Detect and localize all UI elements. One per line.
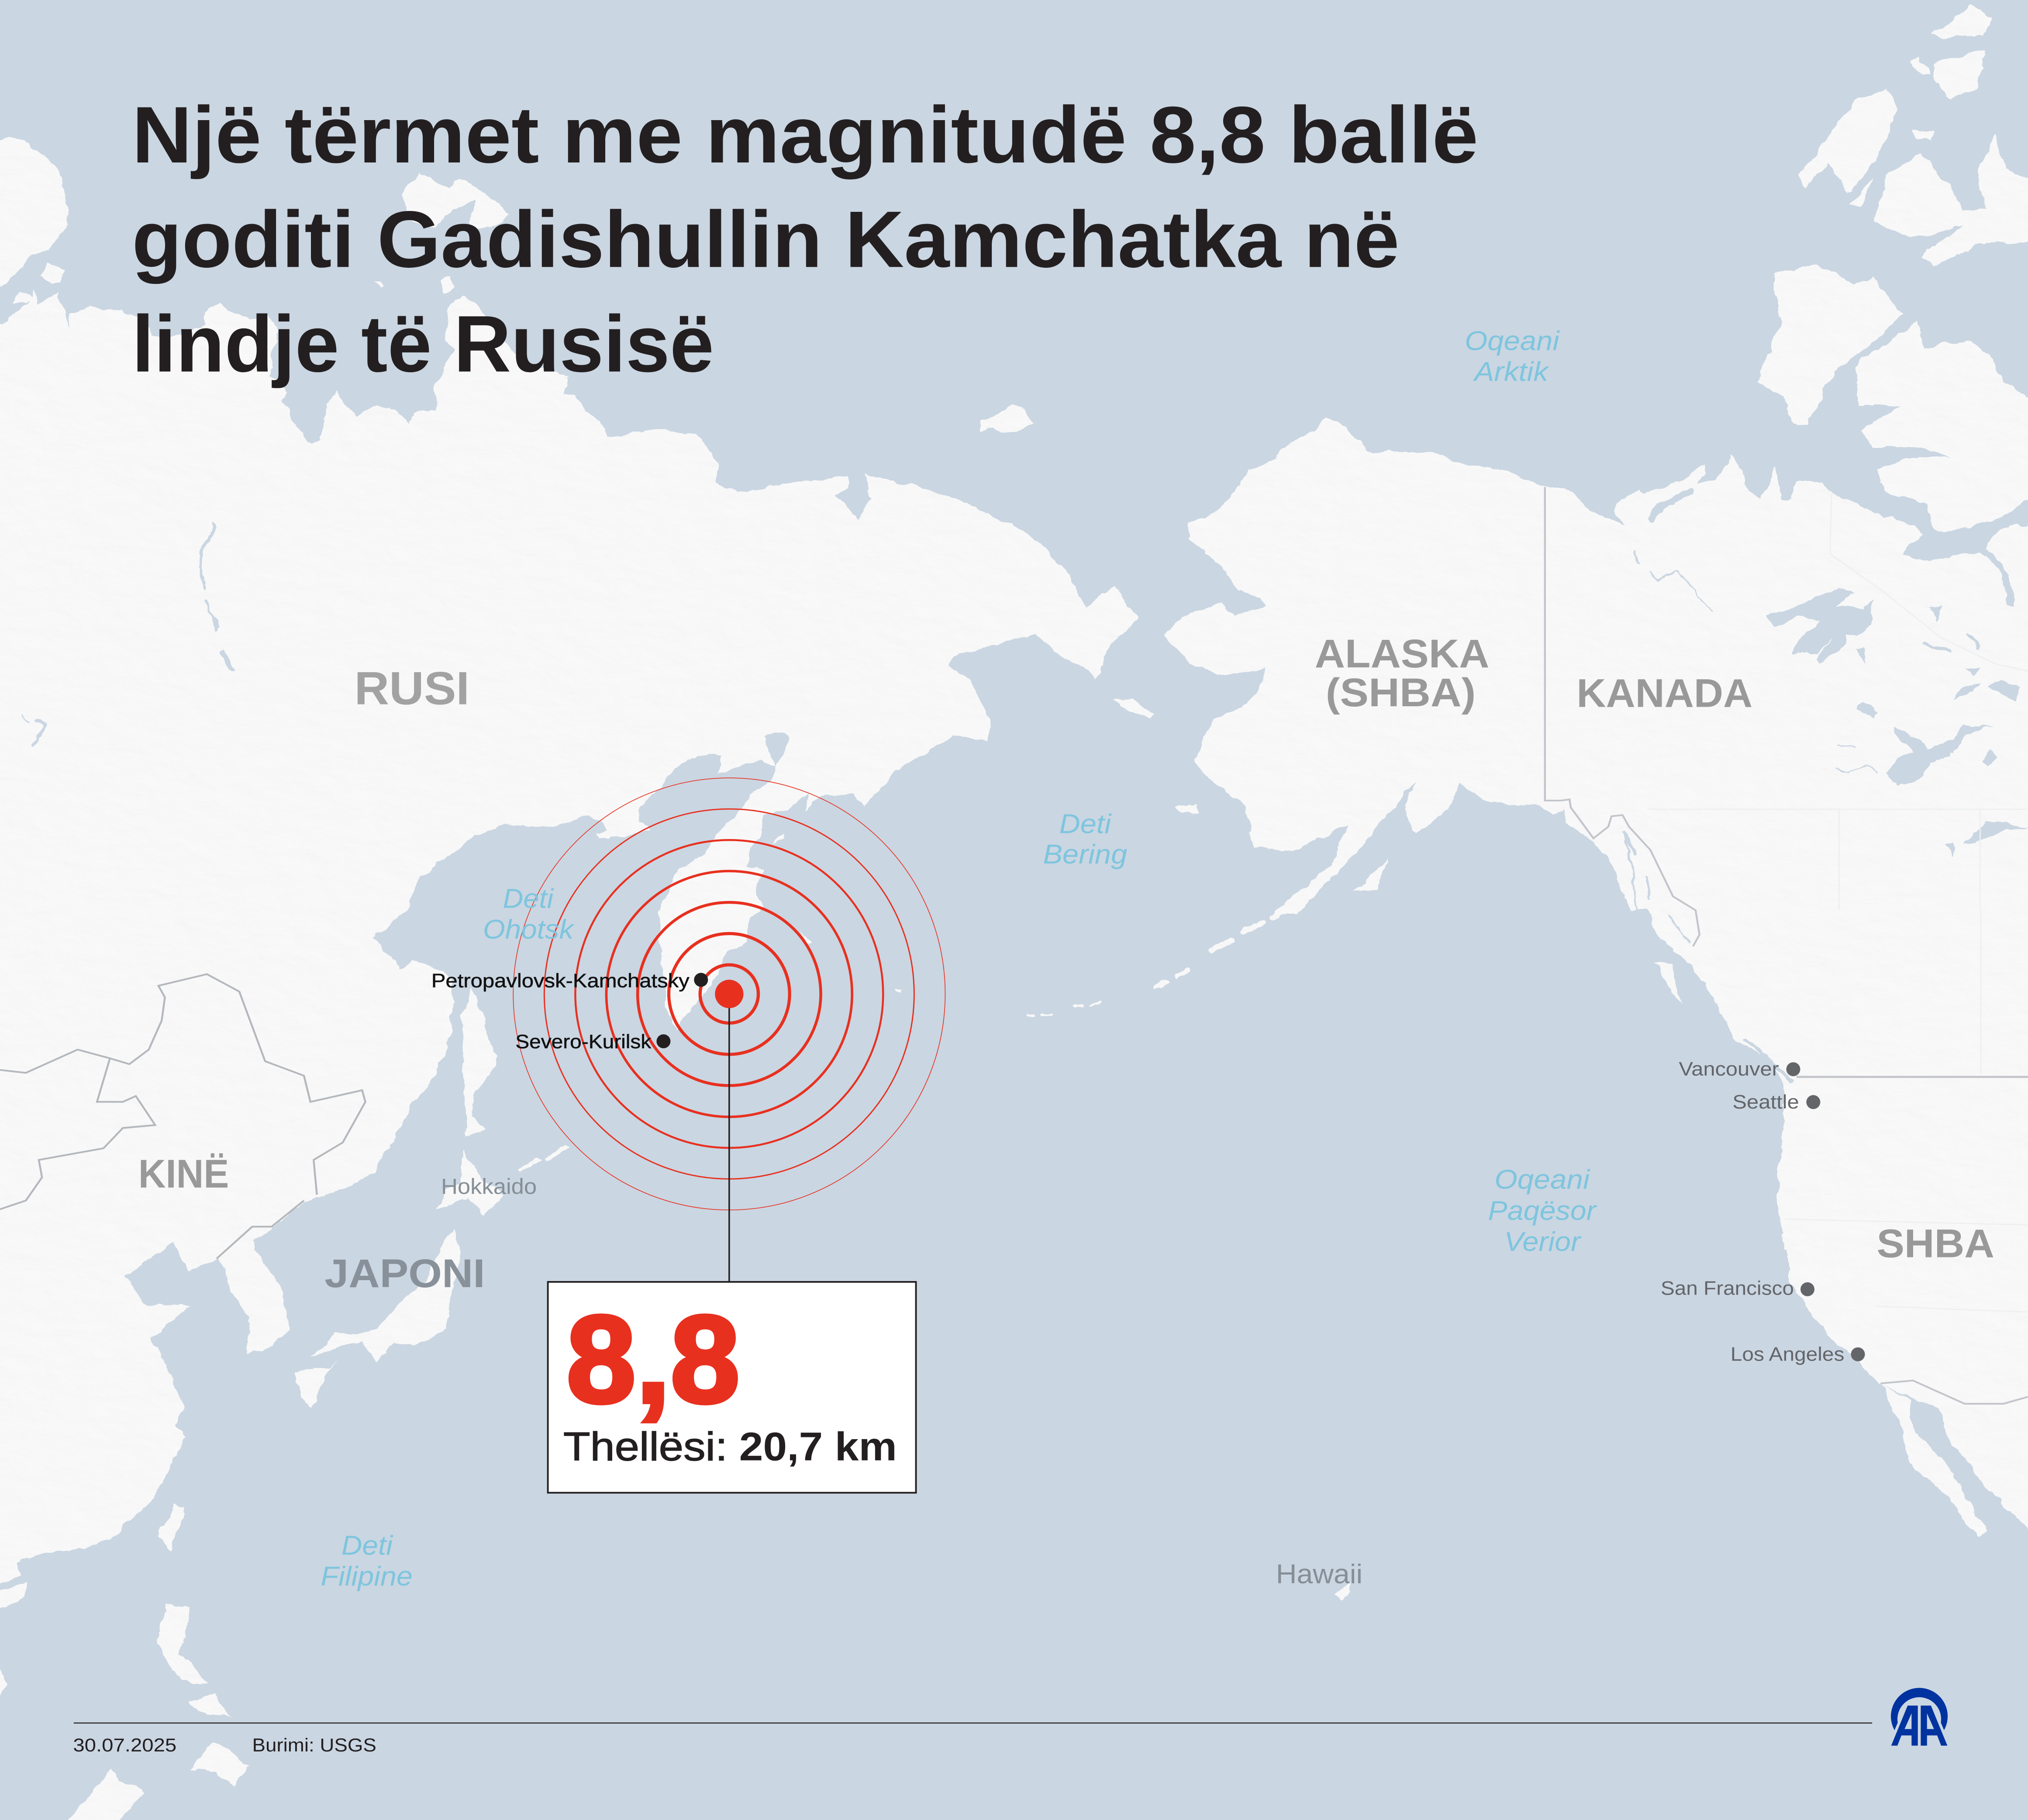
title line 3: lindje të Rusisë <box>132 299 714 389</box>
label: Philippine Sea: Filipine <box>321 1561 413 1592</box>
label: Sea of Okhotsk: Deti <box>503 884 554 914</box>
border: Canada and United States <box>1797 1076 2028 1077</box>
city: Seattle: Seattle <box>1732 1091 1799 1113</box>
label: China: KINË <box>138 1152 229 1196</box>
label: Hawaii: Hawaii <box>1276 1559 1362 1589</box>
label: Arctic Ocean <box>1465 326 1560 387</box>
rivers and inlets: Canada <box>1624 491 2012 1081</box>
city: Vancouver: Vancouver <box>1679 1059 1779 1080</box>
region labels <box>441 1174 1362 1589</box>
land: Baja California <box>1880 1383 1987 1537</box>
city: Los Angeles: Los Angeles <box>1731 1344 1844 1365</box>
label: Sea of Okhotsk: Ohotsk <box>483 915 575 945</box>
city: Seattle <box>1732 1091 1820 1113</box>
label: Sea of Okhotsk <box>483 884 575 945</box>
land: Asian Arctic islands <box>0 139 1033 432</box>
North American city markers <box>1661 1059 1865 1365</box>
rivers and lakes: Siberia <box>23 525 234 746</box>
title line 2: goditi Gadishullin Kamchatka në <box>132 194 1400 284</box>
title line 1: Një tërmet me magnitudë 8,8 ballë <box>132 90 1478 180</box>
label: Philippine Sea: Deti <box>341 1530 393 1561</box>
province and state lines <box>1647 494 2028 1312</box>
depth label: Thellësi: <box>563 1425 728 1469</box>
land: Alaska and western Canada / United States <box>1166 418 2028 1540</box>
land: Sakhalin, Japan and Asian islands <box>0 834 1350 1820</box>
land: North American islands <box>1114 6 2028 1006</box>
borders: Russia, China and Korea <box>0 974 366 1259</box>
label: Canada: KANADA <box>1576 671 1752 716</box>
label: Bering Sea: Deti <box>1059 809 1112 839</box>
Kamchatka city markers <box>431 970 708 1053</box>
label: Arctic Ocean: Oqeani <box>1465 326 1560 356</box>
epicentre marker <box>715 980 743 1008</box>
title <box>132 90 1478 389</box>
label: Russia: RUSI <box>355 662 469 715</box>
city: Severo-Kurilsk: Severo-Kurilsk <box>515 1031 652 1053</box>
sea labels <box>321 326 1597 1592</box>
icon: Anadolu Agency logo <box>1891 1688 1948 1746</box>
label: North Pacific Ocean: Verior <box>1504 1227 1582 1257</box>
border: United States and Mexico <box>1880 1381 2028 1404</box>
label: Alaska: ALASKA <box>1315 632 1489 676</box>
label: Philippine Sea <box>321 1530 413 1592</box>
callout box <box>548 1282 916 1493</box>
label: Bering Sea <box>1043 809 1128 870</box>
label: Hokkaido: Hokkaido <box>441 1174 537 1199</box>
date: 30.07.2025 <box>73 1735 176 1756</box>
inland water <box>23 491 2028 1081</box>
label: USA in parentheses: (SHBA) <box>1326 670 1476 715</box>
source: Burimi: USGS <box>252 1735 376 1756</box>
label: North Pacific Ocean: Oqeani <box>1494 1165 1590 1195</box>
concentric seismic rings <box>513 778 945 1210</box>
label: North Pacific Ocean <box>1488 1165 1597 1257</box>
lakes: northern Canada <box>1768 587 2028 856</box>
city: Petropavlovsk-Kamchatsky: Petropavlovsk-Kamchatsky <box>431 970 690 992</box>
label: North Pacific Ocean: Paqësor <box>1488 1196 1597 1226</box>
leader line from epicentre to callout <box>729 994 730 1282</box>
country labels <box>138 632 1994 1296</box>
callout: magnitude and depth <box>548 1282 916 1493</box>
label: Bering Sea: Bering <box>1043 839 1128 870</box>
footer <box>73 1723 1872 1756</box>
land: Aleutian Islands <box>1025 912 1284 1016</box>
border: Alaska and Canada <box>1545 487 1700 946</box>
land: Eurasia mainland <box>0 290 1140 1584</box>
magnitude value: 8,8 <box>566 1290 740 1429</box>
label: Japan: JAPONI <box>324 1251 485 1296</box>
depth value: 20,7 km <box>739 1425 897 1469</box>
city: San Francisco: San Francisco <box>1661 1278 1794 1299</box>
label: Arctic Ocean: Arktik <box>1473 357 1549 387</box>
label: United States: SHBA <box>1876 1222 1994 1266</box>
